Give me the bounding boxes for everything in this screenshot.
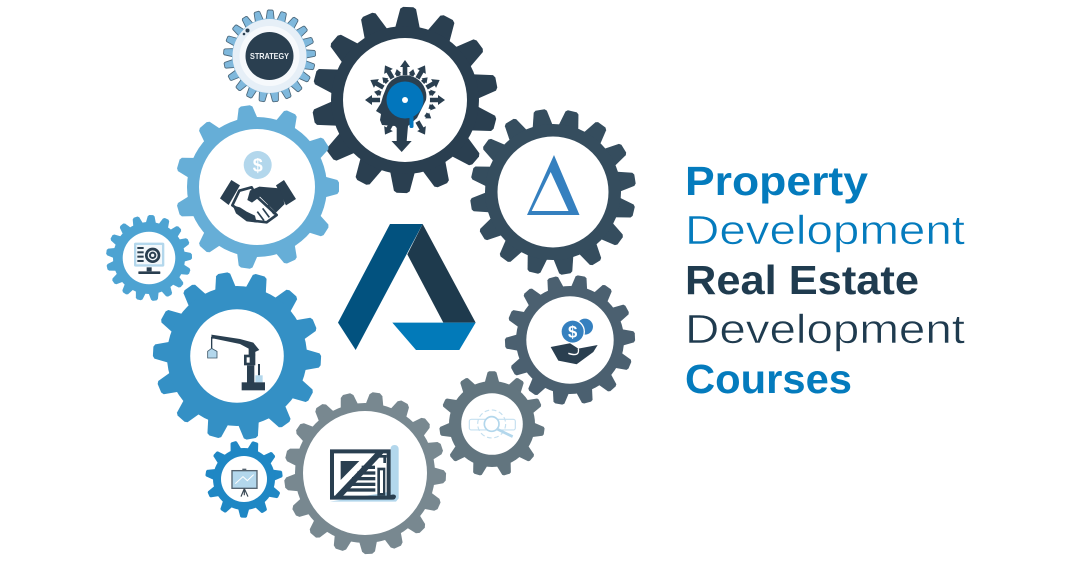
gear: handshake <box>163 94 351 280</box>
title: Real Estate: Real Estate <box>685 257 919 303</box>
title: Development: Development <box>685 306 966 352</box>
icon: presentation board <box>232 469 257 497</box>
logo: central A mark <box>338 224 476 350</box>
label: strategy: STRATEGY <box>250 51 289 61</box>
title text <box>685 158 966 402</box>
icon: delta triangle <box>527 155 580 215</box>
title: Property: Property <box>685 158 868 204</box>
gear: blueprint <box>273 381 457 565</box>
icon: head with radiating arrows <box>365 60 445 152</box>
icon: dollar coin <box>244 151 272 179</box>
icon: crane <box>208 335 265 390</box>
title: Courses: Courses <box>685 356 852 402</box>
gear: search <box>439 371 545 477</box>
gear: chart board <box>195 431 293 527</box>
icon: coins over hand <box>551 319 598 364</box>
icon: magnifier over gear <box>469 410 515 438</box>
icon: dollar coin: $ <box>253 156 263 176</box>
icon: coins over hand: $ <box>568 323 578 342</box>
gear: delta <box>458 97 648 287</box>
icon: handshake <box>220 180 296 223</box>
gear: strategy <box>223 9 316 103</box>
gear: monitor <box>103 213 195 303</box>
gear: money in hand <box>494 265 646 415</box>
title: Development: Development <box>685 207 966 253</box>
gear: crane <box>133 252 341 460</box>
gear: strategic head <box>308 4 502 196</box>
icon: blueprint <box>330 445 399 502</box>
icon: monitor <box>134 243 164 274</box>
